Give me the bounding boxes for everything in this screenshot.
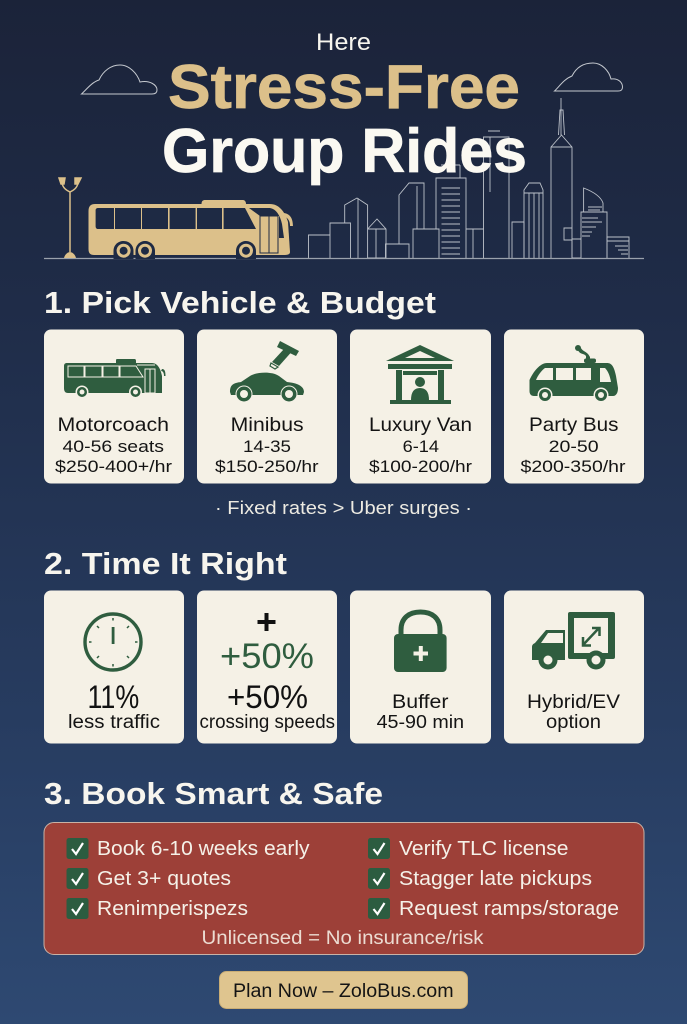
card: Motorcoach: 40-56 seats [62, 438, 164, 456]
card: Party Bus: $200-350/hr [520, 458, 626, 476]
card: Party Bus: Party Bus [529, 414, 619, 436]
icon: plus [258, 613, 276, 631]
icon: street lamp [59, 178, 81, 258]
card: Minibus: Minibus [231, 414, 304, 436]
checklist item: ramps and storage: Request ramps/storage [399, 898, 619, 920]
icon: padlock [394, 612, 447, 672]
button: call to action: Plan Now – ZoloBus.com [233, 981, 454, 1002]
checklist item: quotes: Get 3+ quotes [97, 868, 231, 890]
card: Motorcoach: Motorcoach [58, 414, 169, 436]
card: hybrid/EV: option [546, 712, 601, 733]
card: Minibus: $150-250/hr [215, 458, 319, 476]
icon: temple with person [386, 345, 454, 404]
card: crossing speeds: +50% [227, 679, 308, 715]
card: crossing speeds: crossing speeds [200, 712, 335, 733]
heading: section 3: 3. Book Smart & Safe [44, 776, 383, 811]
panel: booking checklist [44, 822, 644, 954]
checklist item: stagger pickups: Stagger late pickups [399, 868, 592, 890]
card: Party Bus: 20-50 [549, 438, 599, 456]
icon: right cloud [554, 63, 622, 91]
kicker: Here: Here [316, 29, 371, 56]
icon: left cloud [82, 65, 157, 94]
note: fixed rates: · Fixed rates > Uber surges · [215, 498, 472, 518]
checklist item: Renimperispezs: Renimperispezs [97, 898, 248, 920]
card: buffer [350, 590, 491, 744]
icon: car and gavel [230, 341, 304, 402]
card: Luxury Van: 6-14 [403, 438, 439, 456]
card: less traffic [44, 590, 184, 744]
card: Minibus: 14-35 [243, 438, 291, 456]
card: hybrid/EV [504, 590, 644, 744]
illustration: city skyline outline [308, 98, 629, 258]
card: Party Bus [504, 330, 644, 484]
card: Luxury Van: $100-200/hr [369, 458, 473, 476]
icon: clock [85, 614, 141, 670]
checklist item: book early: Book 6-10 weeks early [97, 838, 310, 860]
card: less traffic: 11% [88, 679, 139, 715]
icon: truck with arrows [532, 612, 615, 670]
icon: motorcoach [64, 359, 166, 398]
card: crossing speeds [197, 590, 337, 744]
heading: section 1: 1. Pick Vehicle & Budget [44, 285, 436, 320]
ground line [44, 258, 644, 260]
icon: party bus [530, 345, 618, 396]
title line: Group Rides: Group Rides [162, 117, 527, 186]
card: Motorcoach: $250-400+/hr [55, 458, 173, 476]
card: Minibus [197, 330, 337, 484]
card: crossing speeds: +50% [220, 637, 314, 676]
card: buffer: Buffer [392, 692, 449, 713]
card: Motorcoach [44, 330, 184, 484]
card: Luxury Van [350, 330, 491, 484]
card: Luxury Van: Luxury Van [369, 414, 472, 436]
illustration: gold bus [88, 200, 293, 259]
checklist item: TLC license: Verify TLC license [399, 838, 568, 860]
card: less traffic: less traffic [68, 712, 160, 733]
card: hybrid/EV: Hybrid/EV [527, 692, 620, 713]
heading: section 2: 2. Time It Right [44, 546, 287, 581]
title line: Stress-Free: Stress-Free [168, 53, 520, 122]
warning: unlicensed: Unlicensed = No insurance/risk [202, 928, 484, 949]
card: buffer: 45-90 min [377, 712, 464, 732]
button: call to action [220, 972, 468, 1008]
